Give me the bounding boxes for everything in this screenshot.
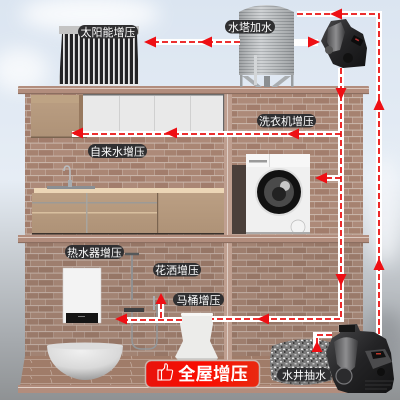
label: solar: 太阳能增压 — [80, 25, 136, 39]
whole-house boost button: 全屋增压 — [178, 364, 248, 384]
label: water tower: 水塔加水 — [228, 21, 272, 34]
water well — [270, 339, 332, 385]
red arrowheads — [71, 8, 384, 352]
bathtub bowl — [47, 342, 123, 380]
whole-house boost button — [146, 360, 260, 388]
shower set — [124, 254, 157, 349]
pipes with flow arrows — [71, 8, 384, 352]
label: toilet: 马桶增压 — [176, 293, 220, 307]
well pump — [326, 324, 394, 393]
label: water heater: 热水器增压 — [67, 245, 122, 259]
icon: thumbs up — [158, 364, 173, 380]
label: well — [277, 368, 331, 382]
toilet — [175, 313, 218, 364]
centre column — [224, 94, 232, 386]
red dashes — [72, 14, 379, 350]
upper booster pump — [321, 19, 367, 68]
kitchen counter and lower cabinets — [32, 166, 224, 234]
label: washing machine: 洗衣机增压 — [259, 114, 314, 128]
water heater — [63, 268, 101, 323]
label: tap water: 自来水增压 — [90, 144, 145, 158]
sink and faucet — [47, 166, 95, 189]
solar water heater — [59, 26, 139, 86]
house walls — [20, 94, 363, 386]
white pipes — [72, 14, 379, 350]
washing machine — [232, 154, 310, 234]
ground floor — [20, 356, 340, 386]
middle floor slab — [18, 235, 369, 243]
roof slab — [18, 86, 369, 94]
label: well: 水井抽水 — [282, 368, 326, 382]
bottom floor slab — [18, 385, 348, 393]
label: shower: 花洒增压 — [155, 263, 199, 277]
water tower — [239, 5, 294, 87]
kitchen upper cabinets — [31, 94, 224, 138]
